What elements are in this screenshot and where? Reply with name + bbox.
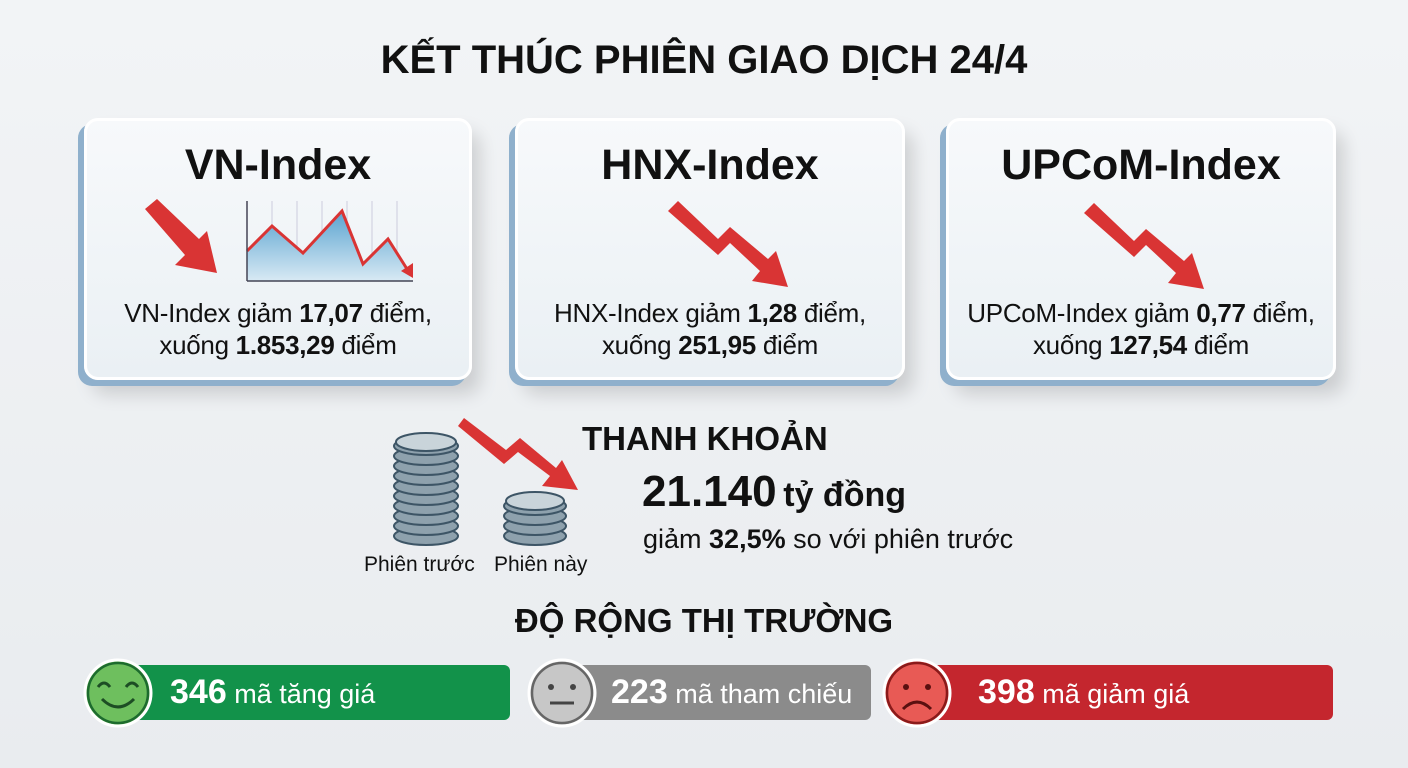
text: VN change — [124, 298, 432, 360]
icon: coin stacks — [393, 432, 567, 546]
bar: declining: 398 mã giảm giá — [978, 673, 1189, 711]
text: VN change: xuống 1.853,29 điểm — [159, 330, 397, 360]
text: UPCoM change: xuống 127,54 điểm — [1033, 330, 1249, 360]
bar: unchanged — [565, 665, 871, 720]
panel: UPCoM-Index — [946, 118, 1336, 380]
icon: neutral face — [528, 658, 596, 728]
bar: unchanged: 223 mã tham chiếu — [611, 673, 852, 711]
text: UPCoM change: UPCoM-Index giảm 0,77 điểm, — [967, 298, 1315, 328]
bar: declining — [922, 665, 1333, 720]
bar: advancing: 346 mã tăng giá — [170, 673, 375, 711]
label: previous session: Phiên trước — [364, 553, 475, 576]
text: VN change: VN-Index giảm 17,07 điểm, — [124, 298, 432, 328]
icon: zigzag arrow — [1084, 203, 1204, 289]
title: KẾT THÚC PHIÊN GIAO DỊCH 24/4 — [381, 38, 1027, 82]
heading: UPCoM-Index: UPCoM-Index — [1001, 141, 1281, 189]
heading: HNX-Index: HNX-Index — [601, 141, 819, 189]
text: liquidity change: giảm 32,5% so với phiên trước — [643, 524, 1013, 554]
icon: happy face — [84, 658, 152, 728]
heading: market breadth: ĐỘ RỘNG THỊ TRƯỜNG — [515, 602, 893, 639]
text: HNX change: xuống 251,95 điểm — [602, 330, 818, 360]
icon: zigzag arrow — [668, 201, 788, 287]
label: this session: Phiên này — [494, 553, 587, 576]
heading: VN-Index: VN-Index — [185, 141, 371, 189]
icon: sad face — [882, 658, 952, 728]
panel: VN-Index — [84, 118, 472, 380]
text: HNX change: HNX-Index giảm 1,28 điểm, — [554, 298, 866, 328]
text: liquidity value: 21.140 tỷ đồng — [642, 467, 906, 516]
icon: down arrow — [145, 199, 217, 273]
bar: advancing — [120, 665, 510, 720]
chart: line — [246, 201, 413, 282]
text: HNX change — [554, 298, 866, 360]
icon: liquidity down arrow — [458, 418, 578, 490]
heading: liquidity: THANH KHOẢN — [582, 420, 828, 457]
text: UPCoM change — [967, 298, 1315, 360]
panel: HNX-Index — [515, 118, 905, 380]
